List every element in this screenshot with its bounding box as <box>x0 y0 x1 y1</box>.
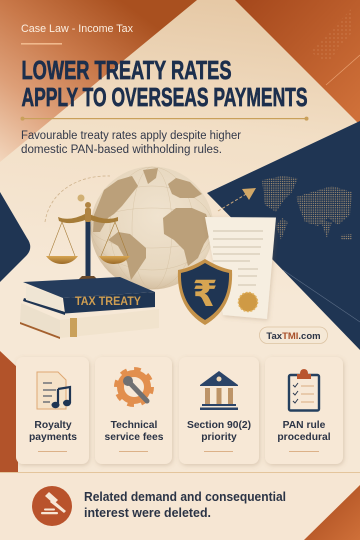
subtitle <box>21 130 241 156</box>
bottom book <box>20 303 159 339</box>
card: section 90(2) priority: priority <box>201 432 237 443</box>
globe <box>90 166 214 290</box>
dashed arrow <box>218 188 256 211</box>
card: technical service fees: service fees <box>105 432 164 443</box>
document lines <box>213 231 263 285</box>
icon: courthouse <box>200 371 238 410</box>
background: orange lower left <box>0 351 30 478</box>
continents <box>93 168 212 280</box>
orange corner <box>304 485 360 540</box>
background: navy panel left <box>0 192 30 282</box>
background: navy panel right <box>207 121 360 350</box>
icon: gavel <box>32 486 72 526</box>
card: section 90(2) priority <box>179 357 259 464</box>
background: thin line on navy <box>283 270 360 322</box>
card: royalty payments: Royalty <box>34 420 72 431</box>
card: technical service fees <box>95 357 172 464</box>
subtitle: Favourable treaty rates apply despite higher <box>21 130 241 142</box>
background: orange top right <box>225 0 360 135</box>
verdict text: Related demand and consequential <box>84 489 286 504</box>
card: pan rule procedural: procedural <box>277 432 331 443</box>
background: thin line top right <box>326 55 360 85</box>
card: pan rule procedural: PAN rule <box>283 420 326 431</box>
title: LOWER TREATY RATES <box>22 55 232 85</box>
bottom band <box>0 472 360 540</box>
card: pan rule procedural <box>265 357 343 464</box>
shield with rupee <box>178 259 232 325</box>
scale pans <box>46 256 78 264</box>
label underline <box>21 43 62 45</box>
orbit dot <box>78 194 84 202</box>
icon: gear and wrench <box>116 370 152 404</box>
card: royalty payments: payments <box>29 432 77 443</box>
document <box>205 217 276 319</box>
website badge <box>260 327 328 344</box>
scale base <box>69 276 106 286</box>
background: dotted texture top right <box>310 8 352 62</box>
verdict text <box>84 489 286 520</box>
background: orange header <box>0 0 360 170</box>
icon: clipboard checklist <box>289 369 319 410</box>
top book: TAX TREATY <box>75 296 141 308</box>
gold rule <box>20 117 308 121</box>
world map dots <box>262 176 352 240</box>
top book <box>23 277 155 315</box>
card: technical service fees: Technical <box>111 420 158 431</box>
balance scales <box>46 202 130 286</box>
website badge: TaxTMI.com <box>266 331 321 342</box>
category label: Case Law - Income Tax <box>21 23 133 35</box>
title <box>22 55 308 112</box>
shield with rupee: ₹ <box>192 274 218 315</box>
wax seal <box>238 292 258 312</box>
card: section 90(2) priority: Section 90(2) <box>187 420 251 431</box>
verdict text: interest were deleted. <box>84 505 211 520</box>
icon: document with music note <box>37 372 71 409</box>
subtitle: domestic PAN-based withholding rules. <box>21 144 222 156</box>
dashed orbit <box>45 176 110 222</box>
card: royalty payments <box>16 357 89 464</box>
